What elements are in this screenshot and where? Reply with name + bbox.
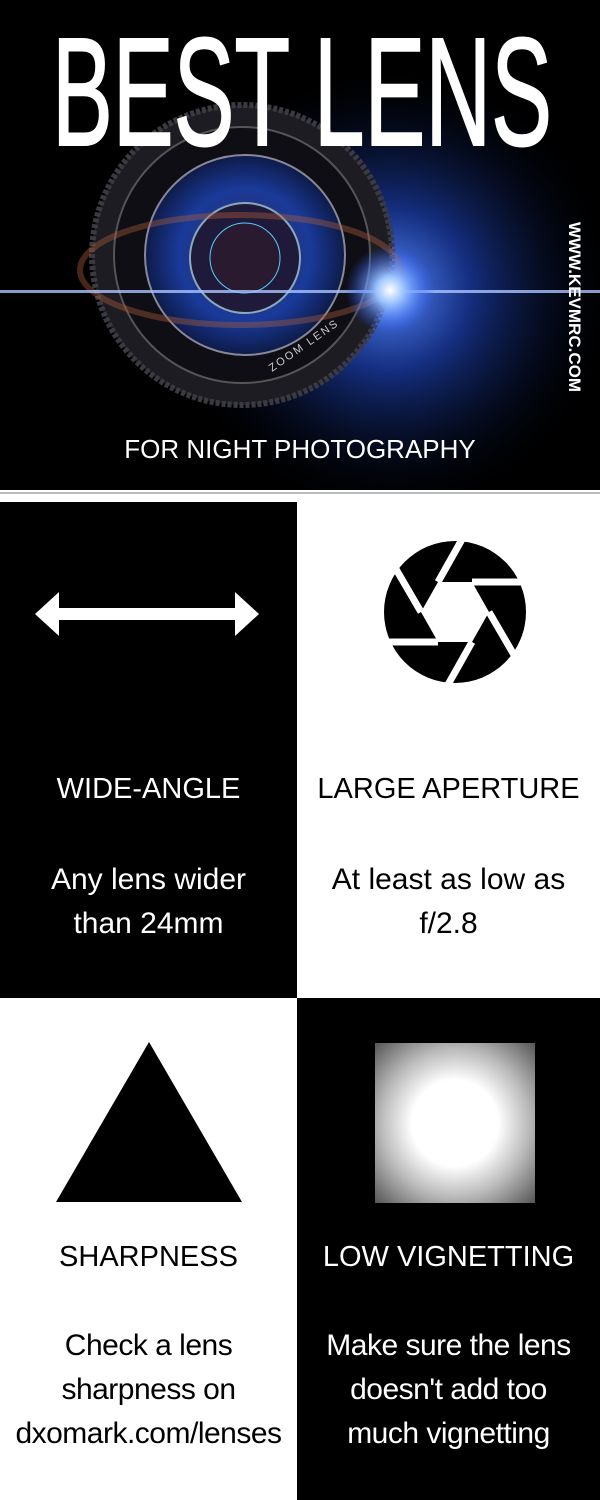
text: At least as low as [332,863,565,896]
panel: low vignetting [297,998,600,1500]
panel: large aperture [297,502,600,998]
text [326,1329,571,1450]
icon: triangle [56,1042,242,1202]
heading: LOW VIGNETTING [323,1241,574,1273]
panel: sharpness [0,998,297,1500]
heading: WIDE-ANGLE [57,773,240,805]
text: than 24mm [73,907,224,940]
text: sharpness on [61,1373,236,1406]
subtitle: FOR NIGHT PHOTOGRAPHY [124,434,476,464]
lens graphic [0,98,600,482]
text: much vignetting [347,1417,550,1450]
panel: wide-angle [0,502,297,998]
text: dxomark.com/lenses [15,1417,282,1450]
heading: LARGE APERTURE [317,773,580,805]
heading: SHARPNESS [59,1241,238,1273]
text: Make sure the lens [326,1329,571,1362]
text: doesn't add too [350,1373,547,1406]
icon: double arrow [35,592,259,636]
icon: aperture [384,541,526,683]
text: Any lens wider [51,863,246,896]
icon: vignette square [375,1043,535,1203]
text [15,1329,282,1450]
text: Check a lens [65,1329,232,1362]
header panel [0,0,600,490]
text: f/2.8 [419,907,478,940]
lens graphic: ZOOM LENS [267,317,342,374]
text [332,863,565,940]
url vertical: WWW.KEVMRC.COM [565,222,584,392]
text [51,863,246,940]
